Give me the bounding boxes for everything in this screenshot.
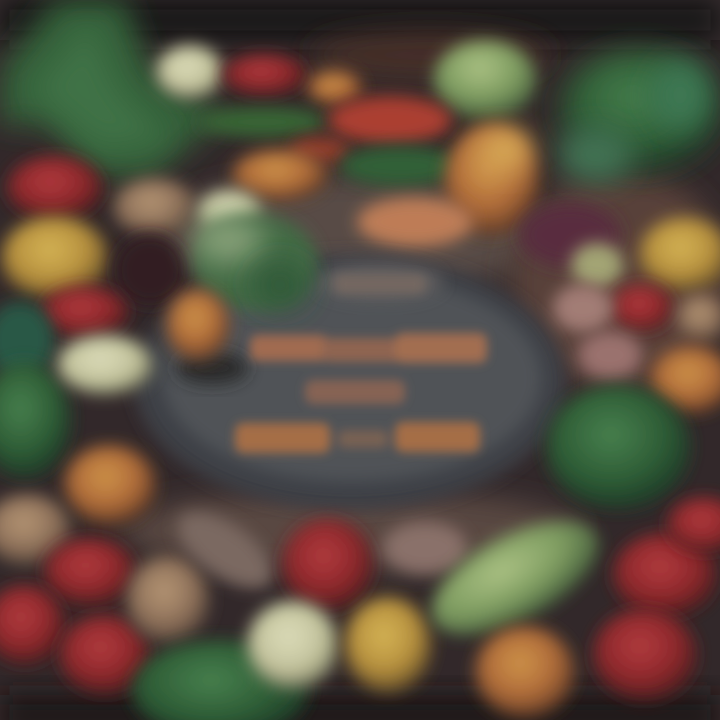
vegetables over plate edge	[57, 214, 317, 395]
vegetables: right side	[520, 203, 720, 509]
vegetables: bottom row	[0, 445, 720, 720]
vegetables: left side	[0, 156, 262, 478]
blurred text on plate	[235, 275, 487, 453]
plate	[134, 254, 566, 510]
vegetables: top row	[0, 0, 720, 247]
